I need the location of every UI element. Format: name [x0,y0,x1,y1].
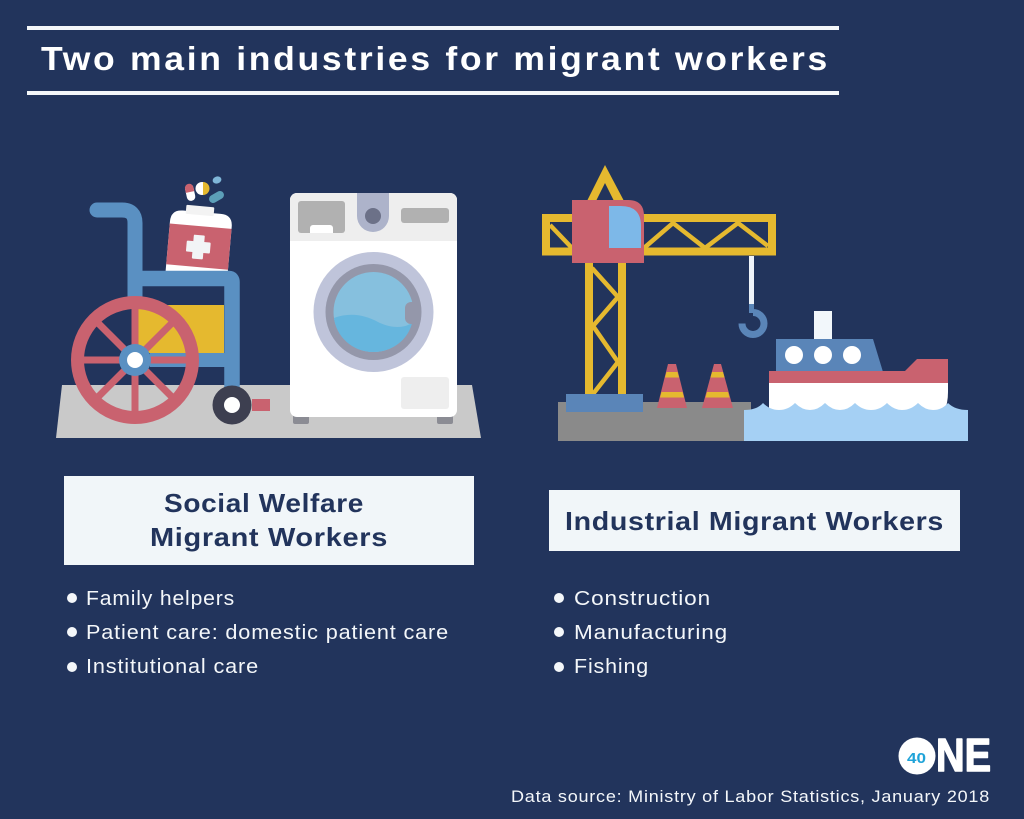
panel: social welfare heading: Social Welfare [164,488,364,518]
icon: medicine bottle [165,204,233,281]
data source: Data source: Ministry of Labor Statistics, January 2018 [511,788,990,806]
panel: industrial heading [549,490,960,551]
icon: washing machine [290,193,457,424]
list: social welfare jobs: Family helpers [86,587,235,610]
title [27,26,839,95]
illustration: crane, cones and ship [546,165,968,441]
panel: social welfare heading [64,476,474,565]
logo: NE [936,729,991,781]
icon: ship [769,311,948,411]
icon: crane [546,165,772,412]
list: industrial jobs: Fishing [574,655,649,678]
panel: industrial heading: Industrial Migrant Workers [565,506,944,536]
list: social welfare jobs [67,587,449,678]
water [744,403,968,441]
icon: pills [184,175,225,204]
list: industrial jobs: Manufacturing [574,621,728,644]
list: industrial jobs [554,587,728,678]
illustration: wheelchair, medicine and washing machine [56,175,481,438]
title: Two main industries for migrant workers [41,40,830,77]
icon: traffic cones [657,364,733,408]
list: social welfare jobs: Patient care: domestic patient care [86,621,449,644]
logo: 40 [907,750,926,767]
panel: social welfare heading: Migrant Workers [150,522,388,552]
icon: wheelchair [78,210,270,424]
list: social welfare jobs: Institutional care [86,655,259,678]
floor platform [56,385,481,438]
dock [558,402,751,441]
logo [898,729,991,781]
list: industrial jobs: Construction [574,587,711,610]
